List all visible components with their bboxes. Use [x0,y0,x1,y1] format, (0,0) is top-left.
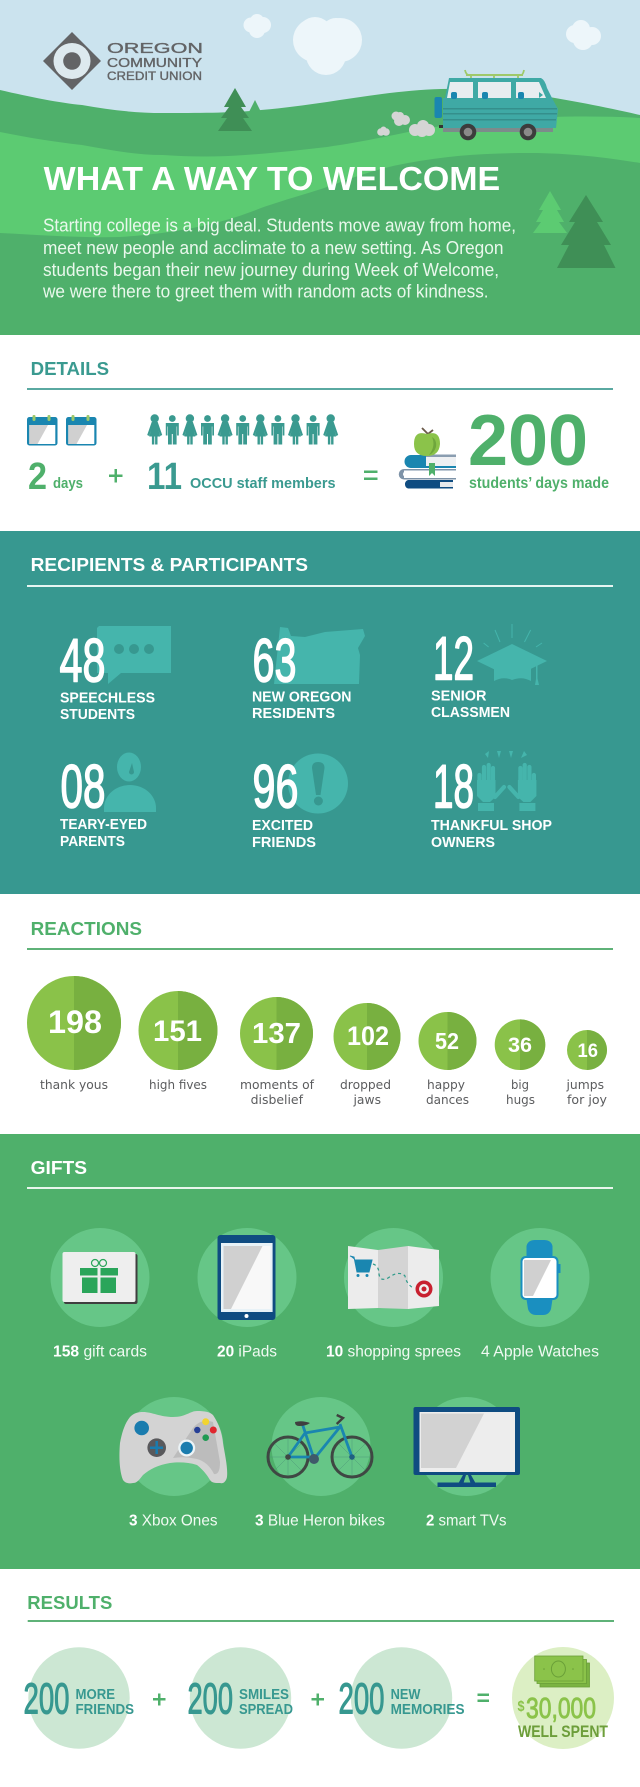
stat: senior classmen: 12 [433,624,474,692]
reaction: moments of disbelief: 137 [252,1018,301,1050]
intro text [42,216,516,302]
icon: van [434,70,558,140]
reaction: happy dances: dances [426,1092,469,1107]
result: smiles spread [188,1647,293,1749]
stat: new oregon residents: 63 [252,626,296,694]
reaction: jumps for joy: for joy [567,1092,608,1107]
reaction: moments of disbelief [240,997,315,1107]
icon: staff people [147,414,338,444]
icon: game controller [119,1411,227,1483]
icon: graduation cap [477,624,547,685]
icon: logo [43,32,203,90]
intro text: students began their new journey during Week of Welcome, [43,260,499,280]
plus sign [109,469,122,482]
result: money well spent: WELL SPENT [518,1723,608,1741]
panel: results [24,1593,614,1749]
reaction: high fives: 151 [153,1015,202,1048]
reaction: jumps for joy: 16 [578,1041,598,1062]
reaction: big hugs: 36 [508,1034,532,1057]
reaction: high fives [138,991,218,1092]
stat: staff: OCCU staff members [190,475,336,492]
icon: books and apple [399,428,456,488]
reaction: jumps for joy [566,1030,608,1107]
heading: results: RESULTS [27,1593,112,1613]
stat: thankful shop owners [431,751,552,851]
result: money well spent: 30,000 [526,1693,596,1725]
title: WHAT A WAY TO WELCOME [44,160,500,197]
stat: excited friends: EXCITED [252,818,313,834]
reaction: thank yous: 198 [48,1004,102,1040]
reaction: dropped jaws [334,1003,400,1107]
result: more friends: FRIENDS [76,1702,134,1718]
result: new memories [338,1647,465,1749]
gift: gift cards [50,1228,150,1361]
result: smiles spread: 200 [188,1674,233,1724]
gift: smart tvs [414,1397,520,1530]
icon: gift card [62,1252,138,1304]
reaction: big hugs [495,1019,545,1107]
result: money well spent [512,1647,614,1749]
equals sign [364,470,378,480]
stat: new oregon residents: NEW OREGON [252,690,352,706]
stat: senior classmen: CLASSMEN [431,705,510,721]
stat: teary-eyed parents: TEARY-EYED [60,817,147,833]
icon: high five hands [477,751,536,811]
reaction: happy dances: 52 [435,1028,459,1054]
stat: days: days [53,476,83,492]
logo wordmark [107,41,203,83]
stat: excited friends: FRIENDS [252,835,316,851]
back hill [0,89,640,335]
gift: bikes [255,1397,385,1530]
icon: clouds [244,14,601,75]
reaction: big hugs: big [511,1077,529,1092]
equals sign [478,1694,489,1702]
gift: smart tvs: 2 smart TVs [426,1513,506,1530]
panel: gifts [0,1134,640,1569]
icon: speech bubble [97,626,171,684]
icon: exclamation [288,754,348,814]
reaction: moments of disbelief: moments of [240,1077,315,1092]
gift: ipads: 20 iPads [217,1344,277,1361]
icon: television [414,1407,520,1487]
stat: thankful shop owners: OWNERS [431,835,495,851]
heading: reactions: REACTIONS [31,919,142,939]
stat: staff: 11 [147,456,182,498]
stat: teary-eyed parents [60,752,156,850]
gift: shopping sprees: 10 shopping sprees [326,1344,461,1361]
reaction: thank yous [27,976,121,1092]
reaction: thank yous: thank yous [40,1077,108,1092]
intro text: Starting college is a big deal. Students move away from home, [43,216,516,236]
stat: teary-eyed parents: 08 [60,752,106,820]
stat: speechless students: SPEECHLESS [60,691,155,707]
gift: apple watches: 4 Apple Watches [481,1344,599,1361]
reaction: dropped jaws: jaws [353,1092,381,1107]
result: more friends: 200 [24,1674,70,1724]
reaction: big hugs: hugs [506,1092,535,1107]
heading: recipients: RECIPIENTS & PARTICIPANTS [31,555,308,575]
logo wordmark: CREDIT UNION [107,69,202,83]
icon: map [348,1246,439,1309]
stat: thankful shop owners: 18 [433,752,474,820]
stat: new oregon residents [252,626,365,722]
intro text: meet new people and acclimate to a new setting. As Oregon [43,238,504,258]
stat: staff [147,456,336,498]
stat: senior classmen: SENIOR [431,689,487,705]
result: more friends: MORE [76,1687,115,1703]
result: new memories: NEW [391,1687,421,1703]
icon: trees on hill [218,88,261,131]
logo wordmark: OREGON [107,41,203,57]
icon: tablet [218,1235,276,1320]
stat: excited friends [252,752,348,851]
panel: header [0,0,640,335]
stat: new oregon residents: RESIDENTS [252,706,335,722]
result: new memories: MEMORIES [391,1702,465,1718]
plus sign [312,1694,324,1706]
gift: ipads [198,1228,296,1361]
result: more friends [24,1647,134,1749]
gift: apple watches [481,1228,599,1361]
reaction: happy dances [418,1012,476,1107]
stat: senior classmen [431,624,547,721]
panel: details [27,359,613,498]
icon: cash stack [535,1656,590,1687]
stat: 200 students: students’ days made [469,475,609,492]
stat: days [28,456,83,498]
plus sign [153,1694,166,1706]
stat: speechless students: 48 [60,626,106,694]
stat: speechless students: STUDENTS [60,707,135,723]
front hill [0,117,640,335]
gift: xbox ones [119,1397,227,1530]
stat: days: 2 [28,456,47,498]
icon: watch [520,1240,560,1315]
gift: gift cards: 158 gift cards [53,1344,147,1361]
result: new memories: 200 [338,1674,384,1724]
reaction: dropped jaws: dropped [340,1077,391,1092]
heading: details: DETAILS [31,359,109,379]
stat: teary-eyed parents: PARENTS [60,834,125,850]
icon: oregon map [274,627,365,684]
reaction: happy dances: happy [427,1077,466,1092]
logo wordmark: COMMUNITY [107,56,203,70]
stat: excited friends: 96 [252,752,298,820]
reaction: dropped jaws: 102 [347,1021,389,1051]
icon: calendars [27,415,96,446]
reaction: moments of disbelief: disbelief [251,1092,304,1107]
reaction: high fives: high fives [149,1077,207,1092]
result: money well spent: $ [518,1698,525,1715]
lower hill [0,153,640,335]
result: smiles spread: SMILES [239,1687,289,1703]
panel: reactions [27,919,613,1107]
icon: exhaust smoke [377,112,435,137]
stat: speechless students [60,626,171,723]
reaction: jumps for joy: jumps [566,1077,604,1092]
stat: thankful shop owners: THANKFUL SHOP [431,818,552,834]
heading: gifts: GIFTS [31,1158,87,1178]
panel: recipients and participants [0,531,640,894]
stat: 200 students: 200 [468,401,588,481]
intro text: we were there to greet them with random acts of kindness. [42,282,489,302]
gift: bikes: 3 Blue Heron bikes [255,1513,385,1530]
icon: foreground trees [533,191,616,268]
icon: crying person [104,752,156,812]
result: smiles spread: SPREAD [239,1702,293,1718]
gift: xbox ones: 3 Xbox Ones [129,1513,218,1530]
gift: shopping sprees [326,1228,461,1361]
icon: bicycle [268,1415,372,1477]
